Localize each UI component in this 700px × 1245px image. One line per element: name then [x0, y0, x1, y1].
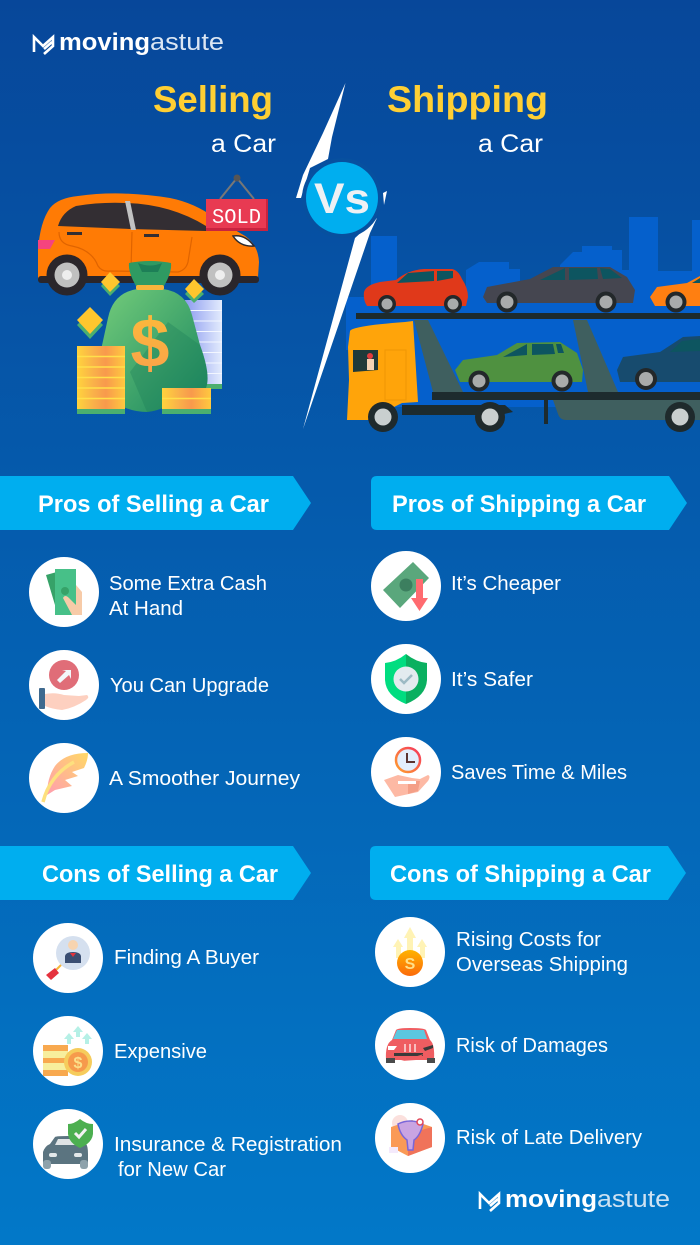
upper deck	[356, 313, 700, 319]
item: cheaper	[371, 551, 561, 621]
item: extra cash	[29, 557, 267, 627]
item: cheaper: It’s Cheaper	[451, 573, 561, 595]
truck wheels	[368, 402, 695, 432]
sold sign: SOLD	[212, 207, 261, 230]
banner: cons of selling	[0, 846, 311, 900]
banner: cons of selling: Cons of Selling a Car	[42, 861, 278, 888]
icon: damaged car	[375, 1010, 445, 1080]
item: insurance	[33, 1109, 342, 1181]
banner: pros of shipping: Pros of Shipping a Car	[392, 491, 646, 518]
item: expensive: Expensive	[114, 1041, 207, 1063]
item: risk of late delivery	[375, 1103, 642, 1173]
icon: upgrade hand	[29, 650, 99, 720]
icon: shield	[371, 644, 441, 714]
item: extra cash: Some Extra Cash	[109, 573, 267, 595]
logo: bottom: moving	[505, 1186, 597, 1213]
logo: top	[34, 29, 224, 56]
heading: selling a car	[153, 79, 276, 158]
icon: rising coin	[375, 917, 445, 987]
banner: cons of shipping: Cons of Shipping a Car	[390, 861, 651, 888]
city skyline	[346, 217, 700, 407]
icon: feather	[29, 743, 99, 813]
item: risk of damages: Risk of Damages	[456, 1035, 608, 1057]
vs badge	[302, 158, 382, 238]
cab	[347, 321, 418, 420]
heading: shipping a car	[387, 79, 548, 158]
banner: pros of selling: Pros of Selling a Car	[38, 491, 269, 518]
ramps	[414, 320, 618, 392]
item: upgrade	[29, 650, 269, 720]
item: smoother journey	[29, 743, 300, 813]
icon: car with shield	[33, 1109, 103, 1179]
item: risk of late delivery: Risk of Late Delivery	[456, 1127, 642, 1149]
icon: cash in hand	[29, 557, 99, 627]
coins	[77, 346, 211, 414]
item: extra cash: At Hand	[109, 598, 183, 620]
logo: bottom: astute	[597, 1186, 670, 1213]
illustration: car carrier truck	[346, 217, 700, 432]
banner: cons of shipping	[370, 846, 686, 900]
item: expensive	[33, 1016, 207, 1086]
item: safer: It’s Safer	[451, 669, 533, 691]
banner: pros of shipping	[371, 476, 687, 530]
item: finding a buyer: Finding A Buyer	[114, 947, 259, 969]
heading: selling a car: a Car	[211, 130, 276, 158]
icon: coins with arrows	[33, 1016, 103, 1086]
chassis	[402, 405, 513, 415]
banner: pros of selling	[0, 476, 311, 530]
lower deck	[432, 392, 700, 400]
icon: magnifier person	[33, 923, 103, 993]
item: finding a buyer	[33, 923, 259, 993]
item: upgrade: You Can Upgrade	[110, 675, 269, 697]
vs badge: Vs	[314, 175, 370, 223]
item: saves time: Saves Time & Miles	[451, 762, 627, 784]
logo: top: moving	[59, 29, 150, 56]
heading: shipping a car: a Car	[478, 130, 543, 158]
item: rising costs: Rising Costs for	[456, 929, 601, 951]
logo: bottom	[480, 1186, 670, 1213]
icon: money down	[371, 551, 441, 621]
heading: selling a car: Selling	[153, 79, 273, 120]
red car	[364, 269, 468, 313]
item: insurance: Insurance & Registration	[114, 1134, 342, 1156]
item: risk of damages	[375, 1010, 608, 1080]
item: safer	[371, 644, 533, 714]
grey car	[483, 267, 635, 312]
sparkles	[77, 272, 204, 339]
icon: clock on hand	[371, 737, 441, 807]
illustration: money bag	[77, 261, 222, 414]
icon: late parcel	[375, 1103, 445, 1173]
trailer bed	[553, 400, 700, 420]
item: rising costs: Overseas Shipping	[456, 954, 628, 976]
item: insurance: for New Car	[118, 1159, 226, 1181]
green car	[455, 342, 583, 392]
item: smoother journey: A Smoother Journey	[109, 768, 300, 790]
navy car	[617, 336, 700, 390]
item: rising costs	[375, 917, 628, 987]
heading: shipping a car: Shipping	[387, 79, 548, 120]
item: saves time	[371, 737, 627, 807]
illustration: money bag: $	[131, 304, 169, 382]
logo: top: astute	[150, 29, 224, 56]
illustration: sold car	[38, 174, 268, 296]
lightning divider	[296, 83, 387, 429]
sold sign	[206, 174, 268, 231]
icon: coins with arrows: $	[74, 1055, 83, 1072]
orange car	[650, 276, 700, 312]
icon: rising coin: S	[405, 956, 416, 973]
